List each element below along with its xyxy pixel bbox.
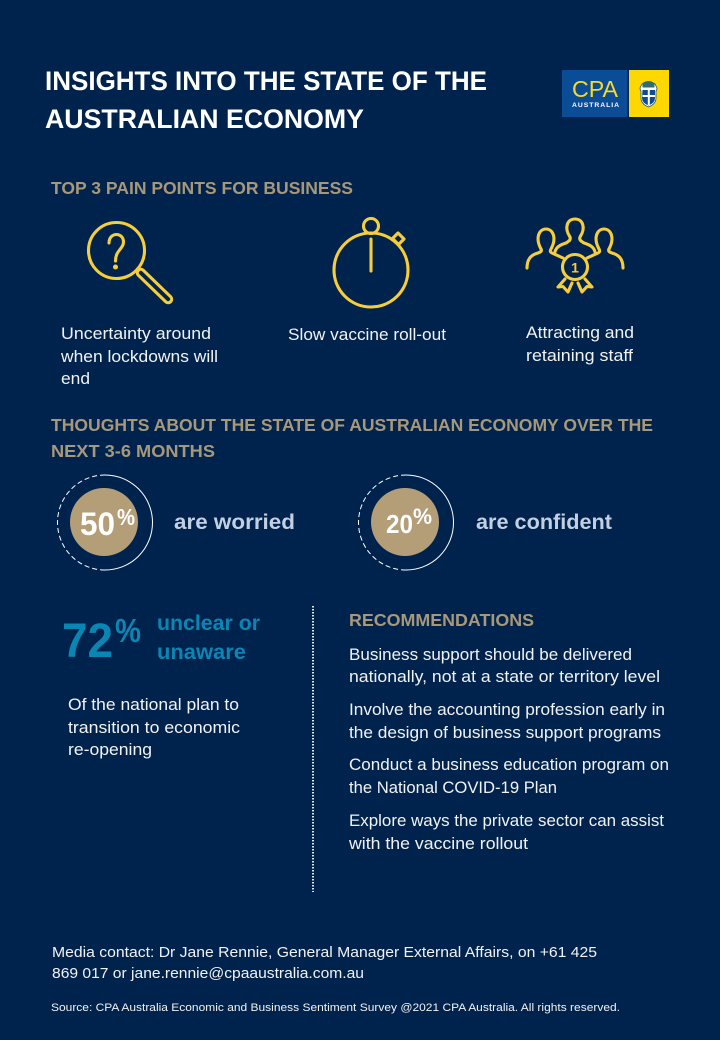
- recommendations list: [348, 646, 669, 853]
- recommendations list: Explore ways the private sector can assist: [349, 812, 664, 830]
- stat: 72% unclear or unaware: 72: [62, 615, 113, 668]
- logo: CPA Australia: AUSTRALIA: [572, 102, 619, 109]
- text: national plan: re-opening: [68, 741, 152, 759]
- stat: 20% confident: 20: [386, 509, 413, 539]
- text: uncertainty: [60, 325, 218, 388]
- title: [45, 66, 487, 134]
- text: national plan: [68, 696, 240, 759]
- media contact: Media contact: Dr Jane Rennie, General Manager External Affairs, on +61 425: [52, 944, 597, 961]
- logo: CPA Australia: CPA: [572, 76, 618, 102]
- logo: CPA Australia: [562, 70, 669, 117]
- heading: thoughts: NEXT 3-6 MONTHS: [51, 441, 215, 461]
- stat: 72% unclear or unaware: unclear or: [157, 611, 261, 635]
- icon: staff with award: [527, 219, 623, 292]
- stat: 50% worried: %: [117, 504, 135, 530]
- text: uncertainty: Uncertainty around: [61, 325, 211, 343]
- title: AUSTRALIAN ECONOMY: [45, 104, 364, 134]
- icon: staff with award: 1: [571, 260, 579, 276]
- text: uncertainty: when lockdowns will: [60, 348, 218, 366]
- text: vaccine: Slow vaccine roll-out: [288, 326, 446, 344]
- heading: recommendations: RECOMMENDATIONS: [349, 610, 534, 630]
- stat: 72% unclear or unaware: [62, 611, 261, 668]
- stat: 72% unclear or unaware: %: [115, 612, 141, 649]
- heading: pain points: TOP 3 PAIN POINTS FOR BUSINESS: [51, 178, 353, 198]
- panel: recommendations: [348, 610, 669, 853]
- stat: 50% worried: are worried: [174, 510, 295, 534]
- icon: stopwatch: [334, 218, 408, 307]
- recommendations list: Business support should be delivered: [349, 646, 632, 664]
- recommendations list: with the vaccine rollout: [348, 835, 528, 853]
- text: national plan: Of the national plan to: [68, 696, 239, 714]
- text: staff: Attracting and: [526, 324, 634, 342]
- recommendations list: Conduct a business education program on: [349, 756, 669, 774]
- media contact: [52, 944, 597, 982]
- recommendations list: nationally, not at a state or territory level: [349, 668, 660, 686]
- title: INSIGHTS INTO THE STATE OF THE: [45, 66, 487, 96]
- stat: 20% confident: are confident: [476, 510, 612, 534]
- icon: magnifying glass with question mark: [88, 222, 173, 304]
- text: uncertainty: end: [61, 370, 90, 388]
- stat: 72% unclear or unaware: unaware: [157, 640, 246, 664]
- text: national plan: transition to economic: [68, 719, 240, 737]
- recommendations list: Involve the accounting profession early in: [349, 701, 665, 719]
- recommendations list: the design of business support programs: [349, 724, 661, 742]
- media contact: 869 017 or jane.rennie@cpaaustralia.com.au: [52, 965, 364, 982]
- text: staff: [526, 324, 634, 365]
- stat: 50% worried: 50: [80, 506, 115, 542]
- stat: 20% confident: [359, 475, 612, 570]
- stat: 20% confident: %: [413, 504, 432, 529]
- heading: thoughts: THOUGHTS ABOUT THE STATE OF AUSTRALIAN ECONOMY OVER THE: [51, 415, 653, 435]
- recommendations list: the National COVID-19 Plan: [349, 779, 557, 797]
- text: staff: retaining staff: [526, 347, 633, 365]
- source: Source: CPA Australia Economic and Business Sentiment Survey @2021 CPA Australia. All rights reserved.: [51, 1002, 620, 1014]
- heading: thoughts: [51, 415, 653, 461]
- stat: 50% worried: [58, 475, 295, 570]
